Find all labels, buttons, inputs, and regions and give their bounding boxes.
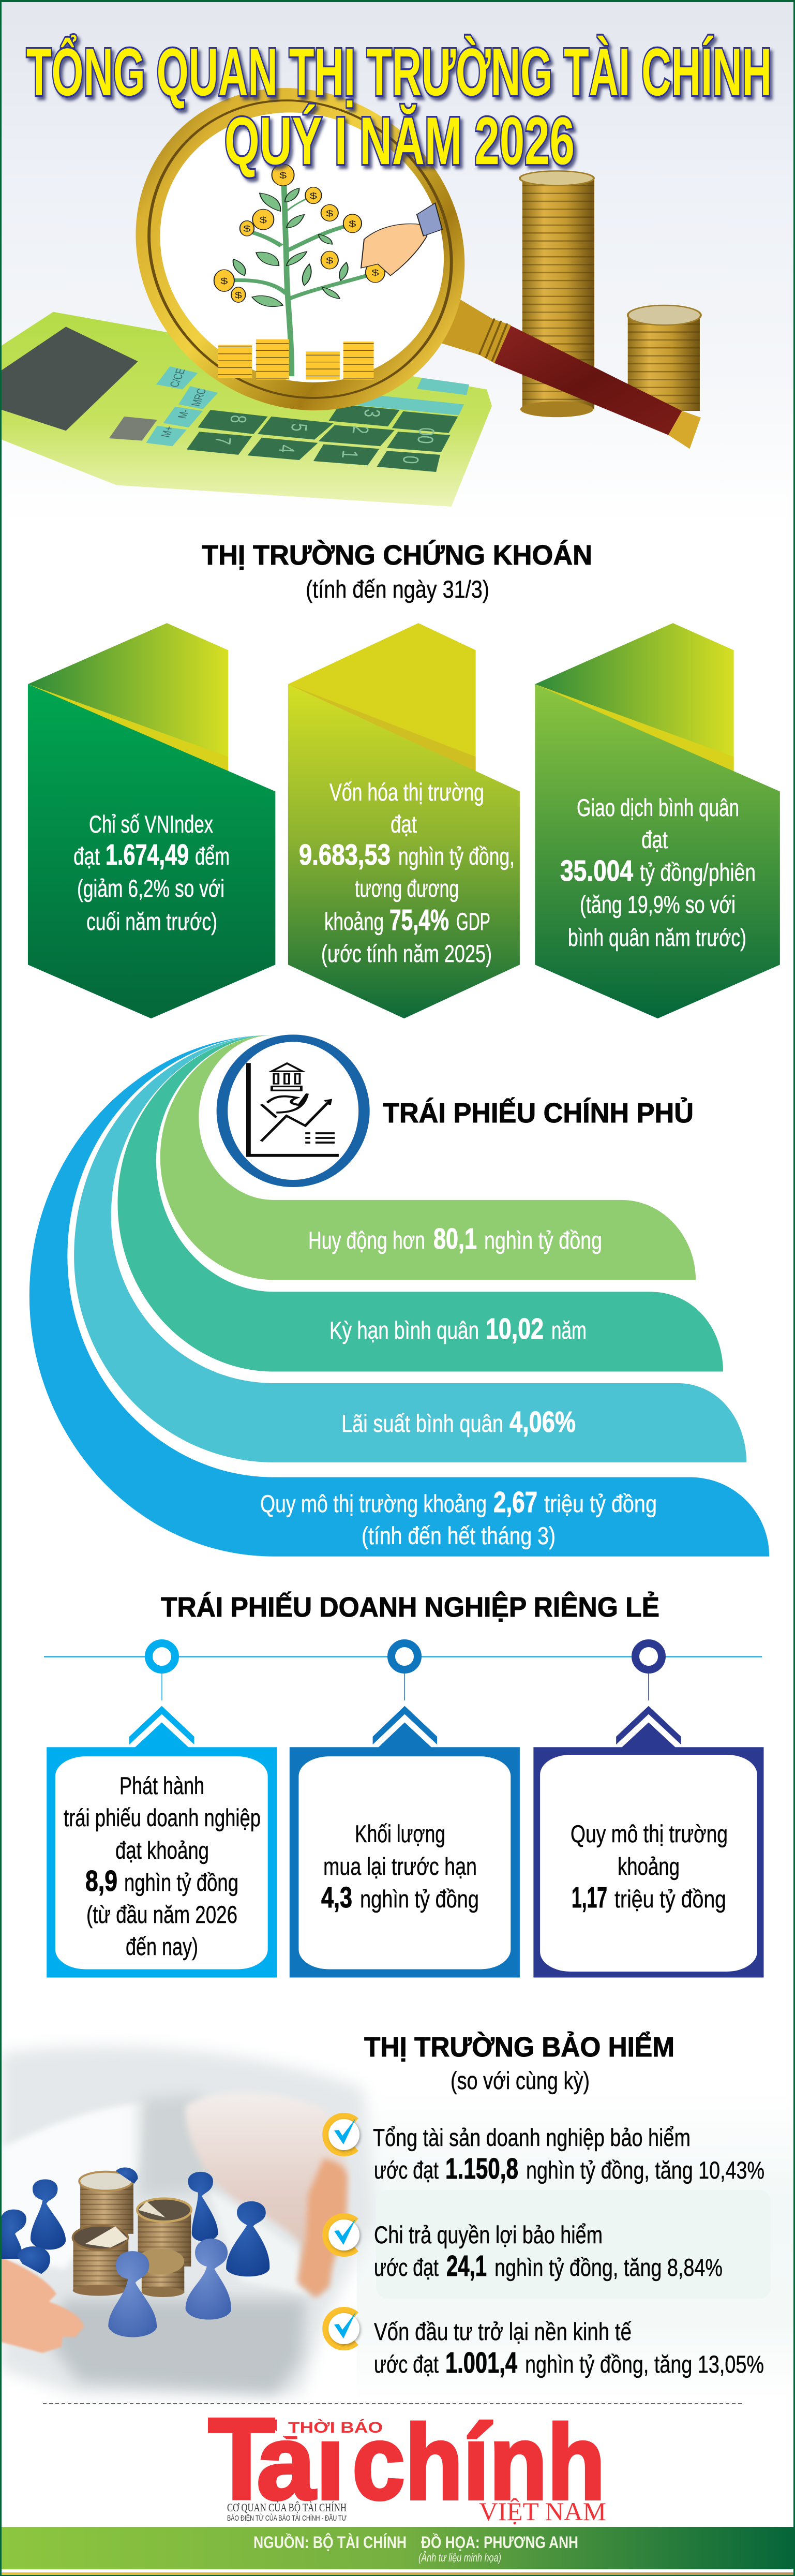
panel: buyback card: mua lại trước hạn [323,1853,477,1880]
panel: VNIndex [28,623,275,1018]
text: total assets [373,2124,764,2185]
logo: Thoi bao Tai chinh Viet Nam: T [208,2393,275,2524]
panel: market capitalization: GDP [456,908,490,935]
calculator: 00 [412,427,440,445]
heading: insurance market: THỊ TRƯỜNG BẢO HIỂM [364,2032,674,2063]
panel: buyback card: nghìn tỷ đồng [360,1885,479,1913]
text: market size: 2,67 [493,1486,537,1519]
panel: government bond swooshes [29,1035,769,1557]
text: reinvested capital: 1.001,4 [445,2346,517,2379]
panel: market capitalization: 75,4% [389,904,449,937]
text: average term [329,1312,587,1345]
logo: Thoi bao Tai chinh Viet Nam: VIỆT NAM [479,2497,606,2526]
panel: average trading: đạt [641,826,668,853]
text: average term: 10,02 [486,1312,544,1345]
icon: check 2 [325,2216,359,2254]
bar: average term [117,1035,723,1372]
money tree illustration: $ [326,256,333,265]
panel: issuance card: trái phiếu doanh nghiệp [64,1804,261,1831]
heading: stock market [202,540,592,603]
calculator: 0 [398,455,424,465]
money tree illustration: $ [326,209,333,218]
panel: market capitalization: nghìn tỷ đồng, [398,842,515,870]
panel: market size card: 1,17 [572,1881,607,1914]
heading: stock market: (tính đến ngày 31/3) [306,575,489,603]
panel: average trading: (tăng 19,9% so với [580,891,736,918]
panel: VNIndex: 1.674,49 [106,838,189,871]
footer band: (Ảnh tư liệu minh họa) [418,2551,501,2564]
panel: buyback card: 4,3 [321,1881,352,1914]
panel: market capitalization: (ước tính năm 2025) [321,940,492,967]
panel: VNIndex: đạt [73,842,100,870]
logo: Thoi bao Tai chinh Viet Nam: chính [352,2403,605,2522]
heading: stock market: THỊ TRƯỜNG CHỨNG KHOÁN [202,540,592,571]
text: interest rate: 4,06% [509,1405,576,1439]
coin stacks [73,2172,191,2297]
bar: market size [29,1035,769,1557]
panel: VNIndex: đểm [195,842,230,870]
panel: market capitalization: Vốn hóa thị trường [329,778,484,806]
heading: government bonds: TRÁI PHIẾU CHÍNH PHỦ [383,1098,694,1129]
insurance photo: coins, pawns and hands [0,2046,376,2394]
logo: Thoi bao Tai chinh Viet Nam: THỜI BÁO [288,2419,383,2436]
panel: VNIndex: (giảm 6,2% so với [77,875,224,902]
panel: issuance card: (từ đầu năm 2026 [86,1901,237,1928]
money tree illustration: $ [220,276,228,286]
logo: Thoi bao Tai chinh Viet Nam: BÁO ĐIỆN TỬ CỦA BÁO TÀI CHÍNH - ĐẦU TƯ [227,2513,347,2523]
text: issuance: nghìn tỷ đồng [484,1226,602,1254]
magnifier lens [112,77,489,421]
calculator: 5 [286,423,312,432]
text: average term: Kỳ hạn bình quân [329,1316,479,1344]
heading: insurance market: (so với cùng kỳ) [451,2067,590,2094]
title [26,34,772,179]
coin stack: tall [520,171,594,417]
text: issuance [308,1222,602,1255]
calculator: 1 [337,450,363,459]
hero photo background [0,0,795,523]
calculator [0,312,492,507]
text: market size: Quy mô thị trường khoảng [260,1490,487,1517]
panel: average trading: 35.004 [560,854,633,887]
money tree illustration: $ [349,219,356,229]
calculator: 2 [348,425,373,435]
footer band: ĐỒ HỌA: PHƯƠNG ANH [421,2533,578,2552]
panel: buyback card [290,1706,520,1977]
money tree illustration: $ [371,268,379,277]
footer band [0,2527,795,2576]
panel: market capitalization: khoảng [324,908,384,935]
bar: issuance [160,1035,696,1280]
text: interest rate: Lãi suất bình quân [341,1410,503,1437]
panel: market size card: triệu tỷ đồng [614,1885,726,1913]
text: benefits paid: 24,1 [446,2249,487,2283]
calculator: M+ [159,425,176,438]
logo: Thoi bao Tai chinh Viet Nam [208,2393,606,2526]
heading: insurance market [364,2032,674,2094]
money tree illustration: $ [279,171,287,180]
panel: market capitalization [288,623,520,1018]
panel: issuance card: 8,9 [85,1864,117,1898]
icon: check 1 [325,2116,359,2153]
text: issuance: Huy động hơn [308,1226,425,1254]
icon: government bond chart [222,1038,364,1183]
text: average term: năm [551,1316,587,1344]
logo: Thoi bao Tai chinh Viet Nam: ài [257,2403,345,2522]
calculator: 8 [226,414,251,424]
panel: issuance card [47,1706,277,1977]
text: benefits paid: ước đạt [374,2254,439,2281]
soft photo backdrop [0,2046,376,2394]
panel: issuance card: đạt khoảng [115,1837,209,1864]
text: reinvested capital [374,2318,764,2379]
text: issuance: 80,1 [433,1222,477,1255]
text: benefits paid [374,2221,723,2283]
footer band: NGUỒN: BỘ TÀI CHÍNH [253,2533,407,2552]
money tree illustration [214,164,442,379]
panel: average trading: tỷ đồng/phiên [640,858,756,886]
money tree illustration: $ [260,215,267,225]
timeline connector [44,1644,762,1700]
coin stack: short [628,305,701,411]
money tree illustration: $ [243,224,251,234]
panel: market capitalization: tương đương [355,875,459,902]
calculator: M- [175,408,192,420]
text: market size: triệu tỷ đồng [544,1490,657,1517]
panel: issuance card: nghìn tỷ đồng [124,1869,238,1896]
panel: market capitalization: đạt [391,810,417,838]
logo: Thoi bao Tai chinh Viet Nam: CƠ QUAN CỦA BỘ TÀI CHÍNH [227,2501,347,2514]
panel: market size card: Quy mô thị trường [571,1820,728,1847]
icon: check 3 [325,2310,359,2347]
text: benefits paid: Chi trả quyền lợi bảo hiểm [374,2221,603,2248]
calculator: 3 [359,408,385,418]
panel: average trading: Giao dịch bình quân [577,794,739,821]
pawns [1,2168,269,2337]
panel: buyback card: Khối lượng [355,1820,445,1847]
panel: issuance card: Phát hành [119,1772,204,1799]
pale panel behind insurance list [376,2190,771,2299]
text: benefits paid: nghìn tỷ đồng, tăng 8,84% [494,2254,723,2281]
text: total assets: Tổng tài sản doanh nghiệp bảo hiểm [373,2124,691,2151]
money tree illustration: $ [235,290,242,300]
panel: issuance card: đến nay) [126,1933,198,1960]
text: total assets: 1.150,8 [445,2152,518,2185]
calculator: MRC [189,388,209,407]
magnifier handle [441,299,701,449]
hand: left [0,2256,84,2353]
calculator: C/CE [168,368,188,388]
tinted area behind insurance list [357,2091,795,2401]
panel: market size card: khoảng [618,1853,680,1880]
panel: market capitalization: 9.683,53 [299,838,391,871]
title: QUÝ I NĂM 2026 [224,103,575,179]
text: total assets: ước đạt [374,2156,439,2184]
calculator: 4 [274,444,299,454]
panel: average trading [535,623,780,1018]
panel: VNIndex: Chỉ số VNIndex [89,810,213,838]
text: market size: (tính đến hết tháng 3) [362,1522,556,1549]
heading: corporate bonds: TRÁI PHIẾU DOANH NGHIỆP RIÊNG LẺ [161,1591,659,1623]
hero illustration: calculator, coins and magnifier [0,77,701,507]
calculator: 7 [210,436,236,446]
money tree illustration: $ [310,191,317,201]
bar: interest rate [74,1035,746,1462]
panel: VNIndex: cuối năm trước) [86,908,217,935]
text: reinvested capital: ước đạt [374,2350,439,2378]
text: reinvested capital: Vốn đầu tư trở lại nền kinh tế [374,2318,632,2345]
panel: market size card [533,1706,763,1977]
text: market size [260,1486,657,1549]
hand: right [185,2092,347,2297]
